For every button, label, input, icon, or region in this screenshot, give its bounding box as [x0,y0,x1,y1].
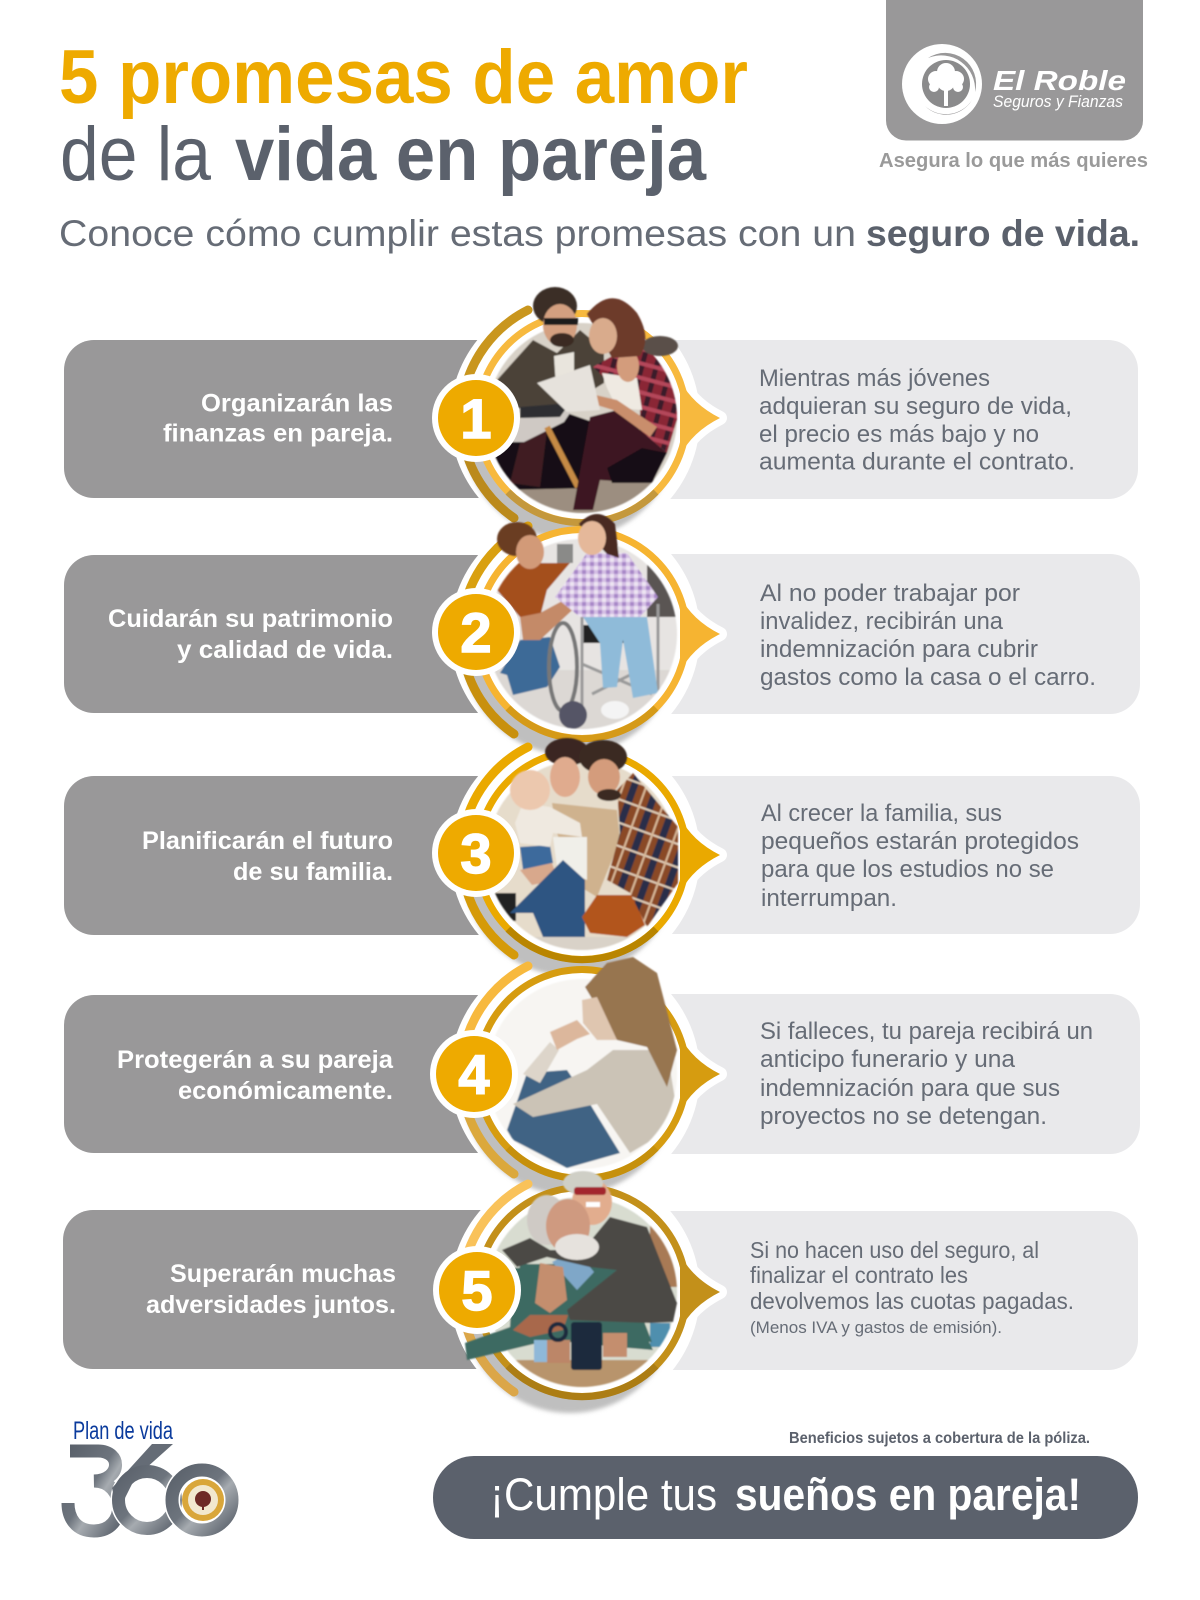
panel: promise 1 right [600,340,1138,499]
call to action pill [433,1456,1138,1539]
circle 2: wheelchair photo with rings [432,514,720,755]
El Roble logo panel: El Roble [993,65,1126,96]
photo: senior couple embracing [465,1171,683,1390]
panel: promise 5 left [63,1210,563,1369]
call to action pill: sueños en pareja! [735,1469,1081,1520]
white backdrops behind the circles [450,293,720,1417]
panel: promise 5 left: Superarán muchas [170,1260,396,1288]
panel: promise 3 right: para que los estudios no se [761,856,1054,883]
panel: promise 4 right: Si falleces, tu pareja recibirá un [760,1018,1093,1045]
slogan: Asegura lo que más quieres [879,150,1148,172]
panel: promise 1 left: finanzas en pareja. [163,420,393,448]
arrow 5 [680,1254,720,1330]
arrow 4 [680,1036,720,1112]
circle 4: pensive woman photo with rings [430,957,720,1195]
number badge 1: 1 [460,387,492,450]
photo: couple with wheelchair [487,514,677,730]
circle 1: finances photo with rings [432,287,720,539]
panel: promise 5 right: finalizar el contrato les [750,1262,968,1288]
panel: promise 5 right: Si no hacen uso del seguro, al [750,1237,1039,1263]
panel: promise 4 left: Protegerán a su pareja [117,1046,394,1074]
arrow 2 [680,596,720,672]
El Roble logo panel: Seguros y Fianzas [993,92,1123,111]
panel: promise 4 left [64,995,564,1153]
call to action pill: ¡Cumple tus [490,1469,717,1520]
icon: 360 numeral [68,1444,232,1531]
panel: promise 2 right: invalidez, recibirán una [760,608,1004,635]
panel: promise 5 right: devolvemos las cuotas pagadas. [750,1288,1074,1314]
panel: promise 5 right [600,1211,1138,1370]
number badge 2: 2 [460,601,492,664]
photo: parents with baby [487,738,678,951]
panel: promise 4 right: proyectos no se detengan. [760,1103,1047,1130]
icon: gold seal [182,1479,224,1521]
panel: promise 2 right: gastos como la casa o el carro. [760,664,1096,691]
title: de la [60,112,212,197]
panel: promise 1 right: aumenta durante el contrato. [759,448,1075,476]
panel: promise 5 right: (Menos IVA y gastos de emisión). [750,1318,1002,1337]
circle 3: family photo with rings [432,738,720,976]
circle 5: senior couple photo with rings [433,1171,720,1413]
panel: promise 2 left: Cuidarán su patrimonio [108,605,393,633]
number badge 3 [432,809,520,897]
panel: promise 1 right: adquieran su seguro de vida, [759,393,1072,420]
title [59,35,748,197]
panel: promise 3 right: pequeños estarán protegidos [761,828,1079,855]
El Roble logo panel [886,0,1143,140]
subtitle [59,213,1140,254]
number badge 4 [430,1030,518,1118]
Plan de vida 360 logo [68,1417,232,1531]
number badge 5: 5 [461,1259,493,1322]
arrow 3 [680,817,720,893]
icon: El Roble tree emblem [902,44,982,124]
panel: promise 4 right: indemnización para que sus [760,1075,1060,1102]
panel: promise 4 right: anticipo funerario y una [760,1046,1016,1073]
panel: promise 4 right [600,994,1140,1154]
panel: promise 1 left [64,340,564,498]
number badge 5 [433,1246,521,1334]
panel: promise 2 right: indemnización para cubrir [760,636,1038,663]
panel: promise 3 left [64,776,564,935]
number badge 1 [432,374,520,462]
panel: promise 1 left: Organizarán las [201,390,393,418]
panel: promise 1 right: Mientras más jóvenes [759,365,990,392]
number badge 2 [432,588,520,676]
panel: promise 2 right [600,554,1140,714]
panel: promise 3 right: interrumpan. [761,885,897,912]
title: 5 promesas de amor [59,35,748,120]
Plan de vida 360 logo: Plan de vida [73,1417,173,1445]
panel: promise 2 right: Al no poder trabajar por [760,580,1020,607]
panel: promise 1 right: el precio es más bajo y no [759,421,1039,448]
subtitle: seguro de vida. [866,213,1140,254]
title: vida en pareja [235,112,707,197]
photo: couple reviewing finances [487,287,679,516]
panel: promise 3 left: de su familia. [233,858,393,886]
subtitle: Conoce cómo cumplir estas promesas con un [59,213,856,254]
arrow 1 [680,380,720,456]
photo: woman sitting thoughtful [487,957,679,1169]
panel: promise 2 left: y calidad de vida. [177,636,393,664]
panel: promise 3 left: Planificarán el futuro [142,827,393,855]
panel: promise 3 right [600,776,1140,934]
disclaimer: Beneficios sujetos a cobertura de la póliza. [789,1430,1090,1447]
number badge 4: 4 [458,1043,490,1106]
panel: promise 3 right: Al crecer la familia, sus [761,800,1002,827]
number badge 3: 3 [460,822,492,885]
panel: promise 5 left: adversidades juntos. [146,1291,396,1319]
panel: promise 4 left: económicamente. [178,1077,393,1105]
panel: promise 2 left [64,555,564,713]
